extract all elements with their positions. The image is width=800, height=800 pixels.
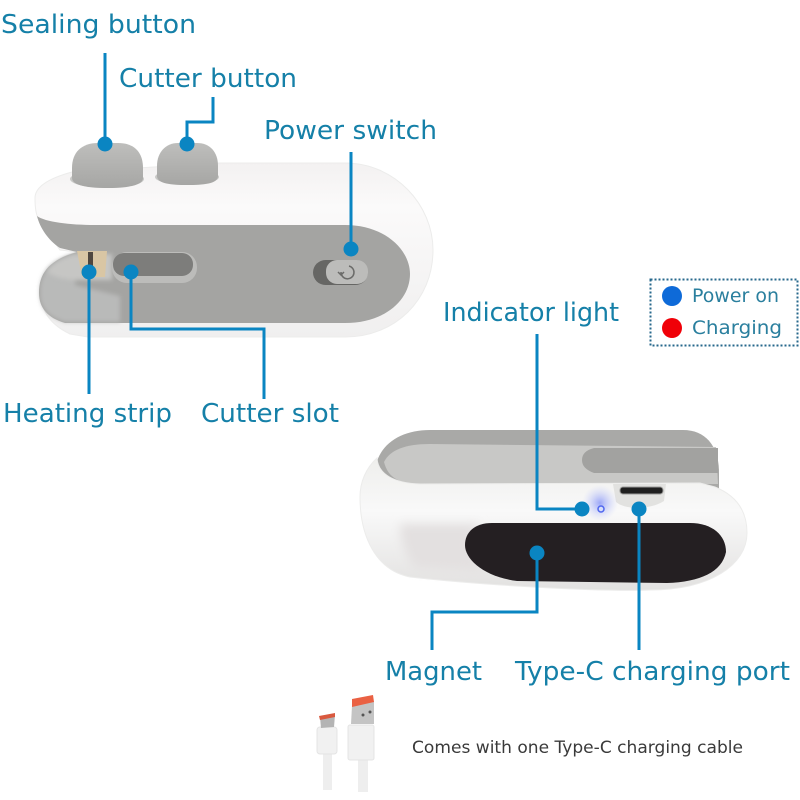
usb-c orange insert bbox=[319, 713, 335, 720]
grey upper jaw bbox=[375, 430, 719, 490]
callout lines: bottom device bbox=[432, 334, 639, 650]
usb-a cable bbox=[358, 758, 368, 792]
device: top sealer view bbox=[35, 143, 433, 337]
usb-a housing bbox=[348, 725, 374, 760]
lower jaw top surface bbox=[47, 254, 112, 280]
sealing button bbox=[72, 143, 143, 188]
charging swatch bbox=[662, 318, 682, 338]
indicator led bbox=[598, 506, 604, 512]
grey jaw inner face bbox=[384, 444, 718, 484]
heating strip dark core bbox=[88, 252, 93, 266]
heating strip bbox=[77, 251, 107, 277]
label: type-c charging port: Type-C charging port bbox=[514, 657, 790, 687]
type-c port bbox=[620, 487, 663, 494]
cutter button bbox=[157, 143, 218, 185]
shaded left side bbox=[400, 524, 485, 572]
white body shell bbox=[35, 163, 433, 337]
magnet bbox=[465, 523, 726, 583]
power on label: Power on bbox=[692, 285, 779, 307]
legend box bbox=[650, 280, 798, 346]
power symbol bbox=[338, 266, 354, 279]
power on swatch bbox=[662, 286, 682, 306]
label: magnet: Magnet bbox=[385, 657, 482, 687]
callout lines: top device bbox=[89, 53, 351, 399]
charging port recess bbox=[613, 484, 666, 508]
callout dots: bottom device bbox=[530, 502, 646, 560]
charging label: Charging bbox=[692, 317, 782, 339]
button collars bbox=[70, 170, 144, 188]
label: power switch: Power switch bbox=[264, 116, 437, 146]
caption: Comes with one Type-C charging cable bbox=[412, 738, 743, 758]
indicator glow bbox=[582, 485, 618, 521]
cutter insert bbox=[113, 253, 193, 276]
grey side panel bbox=[37, 216, 410, 323]
callout dots: top device bbox=[82, 136, 358, 280]
label: cutter button: Cutter button bbox=[119, 64, 297, 94]
label: indicator light: Indicator light bbox=[443, 298, 619, 328]
usb-a orange insert bbox=[352, 695, 374, 707]
power switch knob bbox=[326, 260, 368, 284]
usb-a metal tip bbox=[351, 701, 374, 724]
usb-c housing bbox=[317, 727, 337, 754]
legend border bbox=[650, 280, 798, 346]
icon: type-c charging cable bbox=[317, 695, 374, 792]
usb-c metal tip bbox=[320, 715, 335, 728]
usb-c cable bbox=[323, 752, 332, 790]
usb-a holes bbox=[362, 714, 364, 716]
label: heating strip: Heating strip bbox=[3, 399, 172, 429]
label: sealing button: Sealing button bbox=[1, 10, 196, 40]
white body shell bbox=[360, 458, 747, 590]
cutter slot bbox=[112, 252, 197, 283]
power switch bbox=[313, 260, 368, 285]
inner slot bbox=[582, 448, 718, 473]
label: cutter slot: Cutter slot bbox=[201, 399, 339, 429]
lower jaw lighter face bbox=[40, 253, 120, 322]
device: bottom end view bbox=[360, 430, 747, 590]
